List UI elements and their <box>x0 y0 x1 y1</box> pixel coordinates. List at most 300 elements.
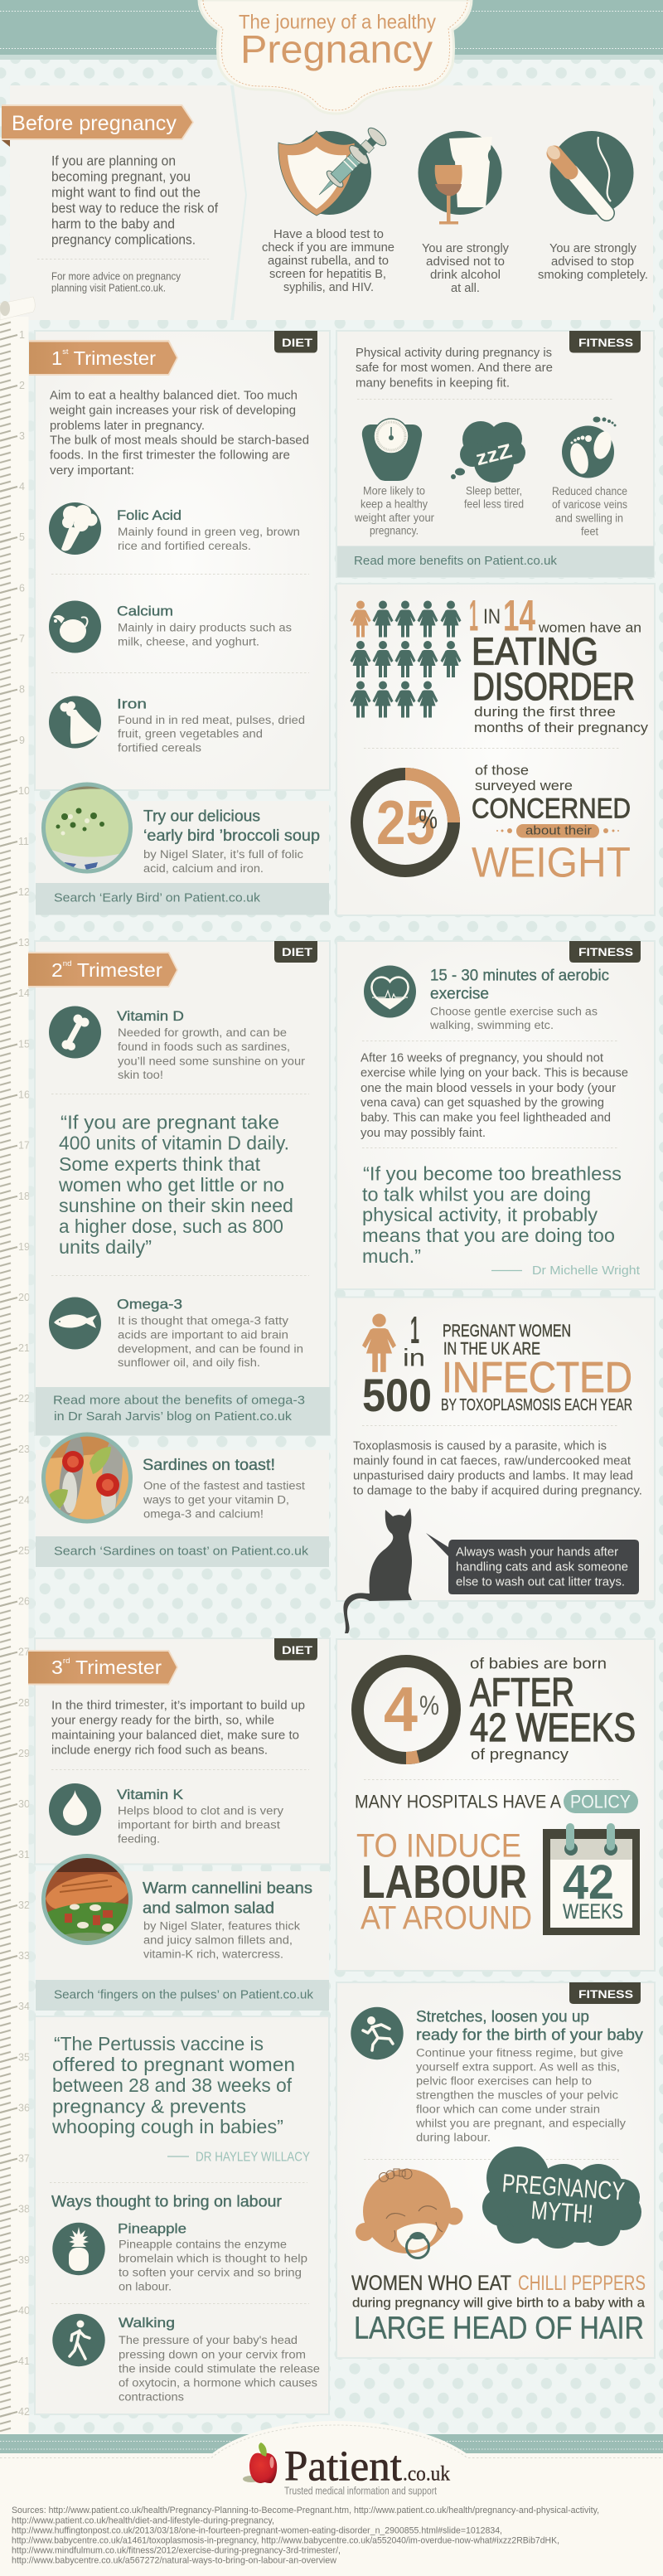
stat: after 42 weeks: of babies are born <box>470 1655 607 1671</box>
bar: fingers on the pulses <box>36 1980 329 2011</box>
ribbon: 3rd trimester: Trimester <box>70 1657 162 1678</box>
ruler: 10 <box>18 785 30 797</box>
quote: pertussis: offered to pregnant women <box>52 2054 295 2075</box>
stat: after 42 weeks: of pregnancy <box>471 1746 569 1763</box>
item: calcium: Mainly in dairy products such as <box>118 622 292 633</box>
cloud: pregnancy myth <box>482 2147 641 2249</box>
logo: Patient.co.uk: .co.uk <box>403 2462 450 2486</box>
caption: veins: feet <box>581 526 598 537</box>
caption: smoking: smoking completely. <box>538 269 648 282</box>
item: walking: of oxytocin, a hormone which causes <box>119 2376 317 2389</box>
ruler: 15 <box>18 1038 30 1050</box>
ruler: 25 <box>18 1545 30 1557</box>
item: vitamin K: important for birth and breast <box>118 1819 280 1831</box>
text: sources: Sources: http://www.patient.co.uk/health/Pregnancy-Planning-to-Become-Pregnant.htm, http://www.patient.co.uk/health/pregnancy-and-physical-activity, <box>12 2506 599 2515</box>
panel: third trimester diet <box>28 1638 330 1864</box>
ruler: 16 <box>18 1089 30 1101</box>
item: pineapple <box>52 2220 307 2293</box>
caption: blood test <box>262 228 394 294</box>
ruler: 6 <box>19 582 25 594</box>
item: vitamin D: found in foods such as sardines, <box>118 1041 290 1053</box>
speech bubble: wash hands: handling cats and ask someone <box>456 1560 628 1574</box>
caption: smoking: advised to stop <box>551 255 634 269</box>
quote: breathless: “If you become too breathless <box>363 1162 622 1184</box>
caption: sleep: Sleep better, <box>466 484 522 497</box>
panel: salmon recipe <box>36 1854 329 2011</box>
text: before pregnancy intro: becoming pregnant, you <box>51 169 191 184</box>
item: folic acid: Mainly found in green veg, brown <box>118 526 300 538</box>
stat: infected: PREGNANT WOMEN <box>443 1322 571 1341</box>
ruler: 22 <box>18 1393 30 1404</box>
text: sardines recipe: ways to get your vitamin D, <box>143 1494 289 1506</box>
ruler: 17 <box>18 1140 30 1152</box>
item: walking: pressing down on your cervix from <box>119 2348 306 2361</box>
icon: cigarette <box>544 131 633 215</box>
text: first trimester intro: Aim to eat a healthy balanced diet. Too much <box>50 388 298 403</box>
item: aerobic exercise: 15 - 30 minutes of aerobic <box>430 967 609 985</box>
ribbon: 2nd trimester: nd <box>63 959 71 968</box>
tab: diet <box>274 941 317 963</box>
caption: veins: and swelling in <box>555 512 623 524</box>
item: omega-3: It is thought that omega-3 fatty <box>118 1315 288 1327</box>
ruler: 39 <box>18 2254 30 2266</box>
item: omega-3: acids are important to aid brain <box>118 1328 288 1341</box>
text: before pregnancy intro: If you are planning on <box>51 153 176 169</box>
footer <box>0 2421 663 2576</box>
item: vitamin K <box>49 1783 283 1846</box>
stat: induce labour <box>356 1827 532 1937</box>
item: stretches: yourself extra support. As well as this, <box>416 2061 620 2073</box>
panel: before pregnancy right <box>234 85 653 320</box>
ruler: 23 <box>18 1443 30 1455</box>
ruler: 5 <box>19 531 25 543</box>
item: walking <box>52 2314 320 2403</box>
ribbon: 3rd trimester: 3 <box>51 1657 62 1678</box>
text: third trimester intro: In the third trimester, it’s important to build up <box>51 1698 305 1713</box>
panel: eating disorder stats <box>336 584 655 915</box>
text: toxoplasmosis explanation: Toxoplasmosis is caused by a parasite, which is <box>353 1439 607 1453</box>
text: toxoplasmosis explanation: to damage to the baby if acquired during pregnancy. <box>353 1484 642 1497</box>
caption: veins <box>552 485 627 537</box>
quote: vitamin D: women who get little or no <box>58 1174 284 1196</box>
item: calcium: Calcium <box>117 604 173 619</box>
text: third trimester intro: include energy rich food such as beans. <box>51 1743 268 1758</box>
caption: sleep <box>464 484 524 511</box>
text: salmon recipe: vitamin-K rich, watercress. <box>143 1948 283 1960</box>
ribbon: 1st trimester: 1 <box>51 347 62 369</box>
ruler: 18 <box>18 1191 30 1202</box>
text: fitness intro <box>356 346 553 390</box>
icon: calendar 42 weeks: 42 <box>563 1856 614 1909</box>
tab: fitness: FITNESS <box>578 945 633 958</box>
item: aerobic exercise: exercise <box>430 985 489 1003</box>
stat: induce labour: AT AROUND <box>361 1900 532 1937</box>
ruler: 19 <box>18 1241 30 1253</box>
text: first trimester intro: problems later in pregnancy. <box>50 419 205 433</box>
ribbon: 3rd trimester <box>28 1650 178 1685</box>
logo: Patient.co.uk: Patient <box>284 2443 403 2491</box>
quote: vitamin D: “If you are pregnant take <box>60 1111 279 1133</box>
quote: vitamin D: sunshine on their skin need <box>59 1195 293 1216</box>
ruler: 37 <box>18 2153 30 2165</box>
item: stretches: during labour. <box>416 2131 491 2144</box>
speech bubble: wash hands: else to wash out cat litter trays. <box>456 1575 625 1589</box>
text: first trimester intro <box>49 388 309 478</box>
text: exercise advice: vena cava) can get squashed by the growing <box>361 1096 604 1109</box>
item: vitamin K: Helps blood to clot and is very <box>118 1804 283 1817</box>
logo: Patient.co.uk: Trusted medical information and support <box>284 2484 437 2497</box>
stat: 1 in 500 <box>362 1308 432 1421</box>
ruler <box>0 297 35 2434</box>
stat: 1 in 500: 500 <box>362 1369 432 1421</box>
quote: breathless: to talk whilst you are doing <box>362 1184 591 1206</box>
caption: blood test: screen for hepatitis B, <box>269 268 386 281</box>
heading: ways to bring on labour: Ways thought to bring on labour <box>51 2194 283 2210</box>
stat: 1 in 14 eating disorder: months of their pregnancy <box>474 720 649 735</box>
donut chart: 4% <box>358 1662 454 1758</box>
ruler: 40 <box>18 2305 30 2316</box>
caption: blood test: syphilis, and HIV. <box>283 281 374 294</box>
caption: blood test: check if you are immune <box>262 241 394 255</box>
text: first trimester intro: foods. In the first trimester the following are <box>50 448 290 463</box>
title plaque: Pregnancy <box>240 27 433 71</box>
caption: alcohol: advised not to <box>426 255 505 269</box>
tab: fitness: FITNESS <box>578 336 633 349</box>
stat: induce labour: TO INDUCE <box>356 1827 521 1864</box>
item: vitamin D: you’ll need some sunshine on your <box>118 1055 306 1068</box>
panel: second trimester fitness <box>336 941 655 1289</box>
text: salmon recipe: and juicy salmon fillets and, <box>143 1933 293 1947</box>
ruler: 21 <box>18 1342 30 1354</box>
text: before pregnancy intro: might want to find out the <box>51 184 201 201</box>
tab: fitness <box>569 331 641 353</box>
item: stretches: ready for the birth of your baby <box>416 2026 644 2045</box>
item: walking: contractions <box>119 2391 184 2403</box>
text: sardines recipe: Sardines on toast! <box>143 1457 275 1474</box>
item: iron: Iron <box>117 696 147 711</box>
quote: pertussis: between 28 and 38 weeks of <box>52 2074 293 2096</box>
stat: concerned about weight <box>472 763 631 885</box>
ruler: 42 <box>18 2406 30 2418</box>
ruler: 11 <box>18 836 29 847</box>
stat: 1 in 500: in <box>403 1345 425 1371</box>
donut chart: 25% <box>356 774 454 871</box>
bar: omega-3 blog: Read more about the benefits of omega-3 <box>53 1393 305 1408</box>
stat: hospitals policy: POLICY <box>570 1791 631 1812</box>
panel: before pregnancy left <box>2 85 247 320</box>
illustration: baby <box>356 2169 462 2258</box>
text: chilli peppers myth: WOMEN WHO EAT <box>351 2272 511 2295</box>
text: exercise advice <box>361 1051 628 1140</box>
bar: sardines search <box>36 1536 329 1567</box>
panel: pertussis and labour <box>35 2016 329 2414</box>
tab: fitness <box>569 1982 641 2004</box>
tab: diet <box>274 1638 317 1660</box>
ruler: 27 <box>18 1647 30 1658</box>
ribbon: 3rd trimester: rd <box>63 1657 70 1665</box>
band left of panels <box>28 331 35 2414</box>
item: vitamin D <box>49 1007 306 1081</box>
stat: 1 in 14 eating disorder: women have an <box>538 620 641 635</box>
icon: woman <box>362 1313 396 1372</box>
text: salmon recipe <box>143 1880 312 1960</box>
donut chart: 25%: 25 <box>376 788 435 857</box>
icon: shield and syringe <box>278 124 390 216</box>
donut chart: 25%: % <box>419 804 438 834</box>
item: omega-3: sunflower oil, and oily fish. <box>118 1356 260 1369</box>
ribbon: before pregnancy: Before pregnancy <box>12 112 177 135</box>
item: stretches: Continue your fitness regime, but give <box>416 2046 623 2059</box>
quote: pertussis: pregnancy & prevents <box>52 2096 246 2118</box>
stat: infected <box>441 1322 632 1414</box>
quote: vitamin D: Some experts think that <box>59 1153 261 1175</box>
caption: weight: keep a healthy <box>361 497 428 511</box>
item: stretches: pelvic floor exercises can help to <box>416 2074 592 2088</box>
title plaque: The journey of a healthy <box>239 12 436 33</box>
item: omega-3 <box>49 1297 303 1369</box>
attribution: Dr Michelle Wright: Dr Michelle Wright <box>532 1264 641 1278</box>
caption: sleep: feel less tired <box>464 497 524 511</box>
panel: third trimester fitness <box>336 1982 655 2358</box>
ruler: 28 <box>18 1697 30 1709</box>
item: iron: fortified cereals <box>118 741 201 754</box>
tab: fitness: FITNESS <box>578 1987 633 2001</box>
text: sources: http://www.patient.co.uk/health/diet-and-lifestyle-during-pregnancy, <box>12 2515 274 2525</box>
text: third trimester intro: maintaining your balanced diet, make sure to <box>51 1728 299 1743</box>
item: pineapple: Pineapple contains the enzyme <box>119 2239 287 2250</box>
text: chilli peppers myth: during pregnancy will give birth to a baby with a <box>352 2297 645 2310</box>
text: sources: http://www.babycentre.co.uk/a567272/natural-ways-to-bring-on-labour-an-overview <box>12 2555 336 2565</box>
photo: sardines <box>41 1432 133 1523</box>
ruler: 34 <box>18 2001 30 2012</box>
text: advice note <box>51 270 181 293</box>
text: sources: http://www.babycentre.co.uk/a1461/toxoplasmosis-in-pregnancy, http://www.babycentre.co.uk/a552040/im-overdue-now-what#ixzz2RBib7dHK, <box>12 2535 559 2545</box>
icon: calendar 42 weeks <box>543 1823 640 1935</box>
icon: sleep cloud: zzZ <box>473 439 515 470</box>
ruler: 32 <box>18 1899 30 1911</box>
search bar: early bird <box>36 883 329 915</box>
item: stretches: whilst you are pregnant, and especially <box>415 2118 626 2129</box>
caption: smoking <box>538 242 648 282</box>
tab: diet <box>274 331 317 353</box>
item: aerobic exercise: walking, swimming etc. <box>429 1019 554 1031</box>
caption: weight <box>354 484 434 537</box>
ribbon: before pregnancy <box>2 104 194 147</box>
panel: sardines recipe <box>36 1432 329 1567</box>
stat: hospitals policy: MANY HOSPITALS HAVE A <box>355 1791 561 1812</box>
ribbon: 2nd trimester: Trimester <box>71 959 162 981</box>
ruler: 36 <box>18 2103 30 2114</box>
text: exercise advice: After 16 weeks of pregnancy, you should not <box>361 1051 604 1065</box>
text: salmon recipe: Warm cannellini beans <box>143 1880 312 1897</box>
item: pineapple: on labour. <box>119 2280 172 2293</box>
caption: alcohol: drink alcohol <box>430 269 501 282</box>
text: fitness intro: Physical activity during pregnancy is <box>356 346 552 360</box>
icon: sleep cloud <box>451 421 525 483</box>
item: vitamin D: Vitamin D <box>117 1008 184 1024</box>
bar: sardines search: Search ‘Sardines on toast’ on Patient.co.uk <box>54 1544 309 1559</box>
item: walking: Walking <box>119 2315 175 2331</box>
ruler: 24 <box>18 1494 30 1506</box>
caption: veins: Reduced chance <box>552 485 627 497</box>
ruler: 13 <box>18 937 30 948</box>
quote: breathless <box>362 1162 622 1267</box>
ruler: 35 <box>18 2051 30 2063</box>
item: vitamin D: skin too! <box>118 1069 163 1081</box>
text: chilli peppers myth <box>351 2272 646 2346</box>
attribution: Dr Hayley Willacy: DR HAYLEY WILLACY <box>196 2151 310 2164</box>
item: folic acid <box>49 502 300 555</box>
text: soup recipe: Try our delicious <box>143 808 260 826</box>
bar: read more benefits: Read more benefits on Patient.co.uk <box>354 554 557 568</box>
ruler: 1 <box>19 329 25 341</box>
item: omega-3: development, and can be found in <box>118 1343 303 1355</box>
text: toxoplasmosis explanation <box>353 1439 642 1497</box>
caption: alcohol: You are strongly <box>422 242 510 255</box>
quote: breathless: means that you are doing too <box>362 1225 615 1246</box>
text: sources: http://www.huffingtonpost.co.uk/2013/03/18/one-in-fourteen-pregnant-women-eating-disorder_n_2900855.html#slide=1012834, <box>12 2525 502 2535</box>
item: folic acid: rice and fortified cereals. <box>118 540 251 552</box>
caption: alcohol: at all. <box>451 282 480 295</box>
panel: first trimester fitness <box>336 331 654 577</box>
text: salmon recipe: by Nigel Slater, features thick <box>143 1920 300 1932</box>
text: exercise advice: one the main blood vessels in your body (your <box>361 1081 616 1095</box>
text: advice note: planning visit Patient.co.uk. <box>51 282 166 293</box>
ruler: 20 <box>18 1292 30 1303</box>
quote: breathless: physical activity, it probably <box>362 1204 598 1225</box>
caption: weight: weight after your <box>354 512 434 524</box>
donut chart: 4%: 4 <box>384 1675 418 1744</box>
text: sardines recipe <box>143 1457 305 1521</box>
text: advice note: For more advice on pregnancy <box>51 270 181 282</box>
stat: concerned about weight: CONCERNED <box>472 793 631 824</box>
text: sources <box>12 2506 599 2565</box>
stat: 1 in 500: 1 <box>410 1308 419 1351</box>
tab: diet: DIET <box>282 945 313 958</box>
item: vitamin K: Vitamin K <box>117 1787 184 1802</box>
item: omega-3: Omega-3 <box>117 1297 182 1312</box>
quote: pertussis: whooping cough in babies” <box>51 2116 283 2137</box>
text: third trimester intro <box>51 1698 305 1758</box>
ruler: 4 <box>19 481 25 492</box>
quote: vitamin D: units daily” <box>59 1236 152 1258</box>
icon: calendar 42 weeks: WEEKS <box>563 1900 623 1924</box>
stat: 1 in 14 eating disorder: during the first three <box>474 704 616 720</box>
item: aerobic exercise <box>364 965 609 1031</box>
text: soup recipe <box>143 808 320 875</box>
stat: concerned about weight: WEIGHT <box>472 839 631 885</box>
ribbon: 1st trimester: Trimester <box>68 347 156 369</box>
item: aerobic exercise: Choose gentle exercise such as <box>430 1005 598 1018</box>
icon: cat <box>343 1508 412 1633</box>
icon: glasses <box>418 131 502 224</box>
ruler: 12 <box>18 886 30 898</box>
text: fitness intro: many benefits in keeping fit. <box>356 376 510 390</box>
caption: alcohol <box>422 242 510 295</box>
ruler: 2 <box>19 380 25 391</box>
stat: after 42 weeks <box>470 1655 636 1763</box>
ribbon: 2nd trimester: 2 <box>51 959 62 981</box>
bar: read more benefits <box>337 546 654 577</box>
stat: 1 in 14 eating disorder: 1 <box>469 592 478 640</box>
stat: concerned about weight: of those <box>475 763 529 778</box>
ribbon: 1st trimester: st <box>62 347 69 356</box>
ruler: 9 <box>19 735 25 746</box>
cloud: pregnancy myth: PREGNANCY <box>501 2168 626 2206</box>
text: exercise advice: baby. This can make you feel lightheaded and <box>361 1111 611 1124</box>
caption: weight: More likely to <box>363 484 425 497</box>
stat: infected: INFECTED <box>442 1354 632 1402</box>
cloud: pregnancy myth: MYTH! <box>530 2195 594 2229</box>
text: before pregnancy intro <box>51 153 218 247</box>
item: walking: The pressure of your baby's head <box>119 2334 298 2346</box>
stat: after 42 weeks: 42 WEEKS <box>470 1706 636 1750</box>
donut chart: 4%: % <box>419 1691 439 1720</box>
item: walking: the inside could stimulate the release <box>119 2363 320 2375</box>
text: sources: http://www.mindfulmum.co.uk/fitness/2012/exercise-during-pregnancy-3rd-trimester/, <box>12 2545 341 2555</box>
item: pineapple: to soften your cervix and so bring <box>119 2267 302 2278</box>
text: salmon recipe: and salmon salad <box>143 1900 274 1917</box>
ruler: 7 <box>19 633 25 645</box>
ruler: 38 <box>18 2204 30 2215</box>
icon: feet <box>562 416 617 478</box>
text: soup recipe: ‘early bird ’broccoli soup <box>143 827 320 845</box>
item: folic acid: Folic Acid <box>117 507 181 523</box>
quote: vitamin D: 400 units of vitamin D daily. <box>59 1133 289 1154</box>
quote: pertussis: “The Pertussis vaccine is <box>54 2033 264 2054</box>
speech bubble: wash hands <box>426 1533 639 1594</box>
panel: toxoplasmosis <box>336 1297 655 1601</box>
panel: first trimester diet <box>29 331 330 790</box>
bar: omega-3 blog: in Dr Sarah Jarvis’ blog on Patient.co.uk <box>54 1409 293 1424</box>
ruler: 14 <box>18 987 30 999</box>
ruler: 8 <box>19 684 25 696</box>
caption: smoking: You are strongly <box>549 242 637 255</box>
item: calcium <box>49 600 292 653</box>
ribbon: 1st trimester <box>29 340 178 376</box>
text: first trimester intro: very important: <box>50 463 134 478</box>
ruler: 26 <box>18 1596 30 1608</box>
text: soup recipe: by Nigel Slater, it’s full of folic <box>143 848 303 861</box>
speech bubble: wash hands: Always wash your hands after <box>456 1545 618 1559</box>
stat: 1 in 14 eating disorder: 14 <box>503 592 535 640</box>
item: stretches: floor which can come under strain <box>416 2103 600 2116</box>
text: before pregnancy intro: best way to reduce the risk of <box>51 201 218 216</box>
icon: scales <box>362 419 422 481</box>
text: toxoplasmosis explanation: unpasturised dairy products and lambs. It may lead <box>353 1469 633 1482</box>
ruler: 41 <box>18 2355 30 2367</box>
ruler: 30 <box>18 1798 30 1810</box>
text: exercise advice: exercise while lying on your back. This is because <box>361 1066 628 1079</box>
item: pineapple: bromelain which is thought to help <box>119 2252 307 2265</box>
photo: salmon <box>41 1854 133 1945</box>
text: sardines recipe: omega-3 and calcium! <box>143 1507 264 1521</box>
ruler: 3 <box>19 430 25 442</box>
text: sardines recipe: One of the fastest and tastiest <box>143 1479 305 1492</box>
ribbon: 2nd trimester <box>28 952 178 987</box>
tab: diet: DIET <box>282 1643 313 1657</box>
caption: weight: pregnancy. <box>370 524 419 537</box>
item: vitamin D: Needed for growth, and can be <box>118 1026 287 1039</box>
stat: induce labour: LABOUR <box>361 1856 527 1909</box>
bar: omega-3 blog <box>36 1387 330 1435</box>
panel: broccoli soup recipe <box>36 782 329 915</box>
item: iron: Found in in red meat, pulses, dried <box>118 714 305 726</box>
people chart: 1 in 14 <box>350 600 461 718</box>
panel: second trimester diet <box>28 941 330 1435</box>
quote: breathless: much.” <box>362 1245 421 1267</box>
stat: concerned about weight: surveyed were <box>475 778 573 793</box>
